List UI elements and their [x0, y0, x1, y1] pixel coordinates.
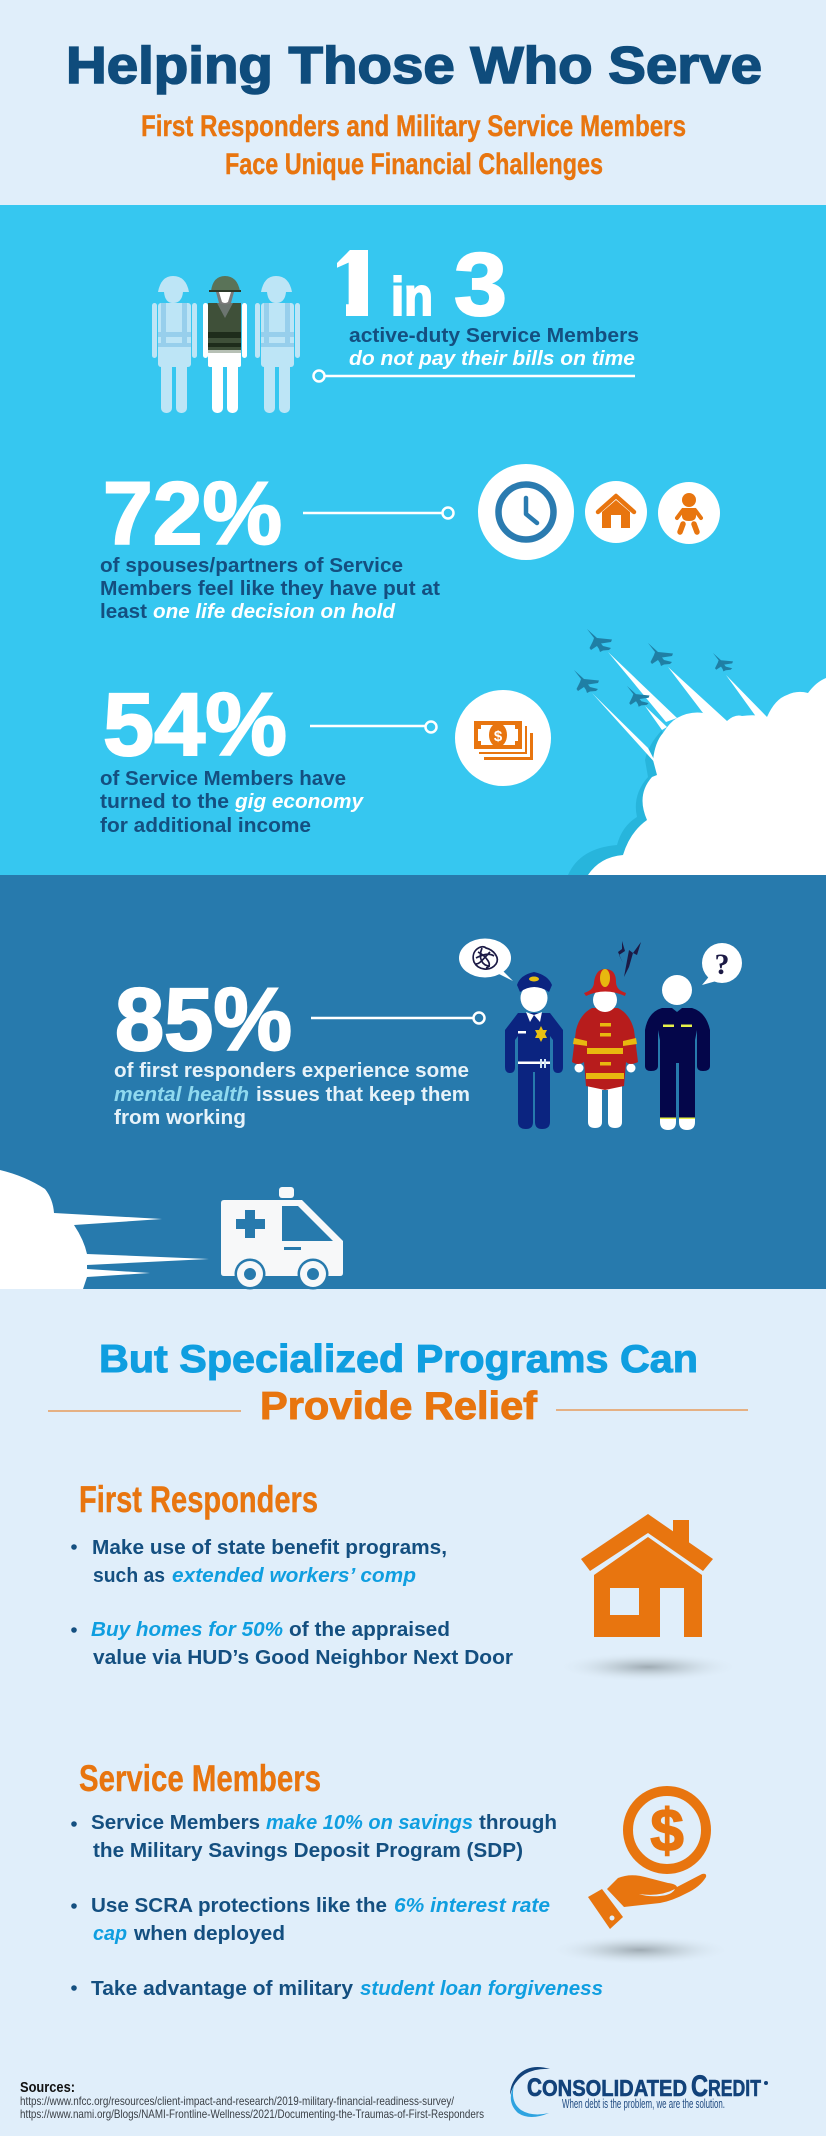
cloud shadow	[568, 730, 680, 875]
stat: 72%: one life decision on hold	[153, 601, 396, 623]
icon: baby	[658, 482, 720, 544]
subheading: Service Members	[79, 1758, 321, 1799]
stat: 72%: least	[100, 601, 147, 623]
stat: 85%: from working	[114, 1107, 246, 1129]
section: service members	[71, 1758, 603, 2000]
bullet: SCRA: cap	[93, 1923, 127, 1945]
title: Helping Those Who Serve	[66, 37, 762, 95]
stat: 1 in 3: in	[391, 267, 433, 327]
heading: relief	[48, 1338, 748, 1428]
bullet: student loan forgiveness	[71, 1978, 603, 2000]
icon: cash stack: $	[494, 728, 503, 745]
icon: cash stack	[455, 690, 551, 786]
sources: https://www.nami.org/Blogs/NAMI-Frontline-Wellness/2021/Documenting-the-Traumas-of-First-Responders	[20, 2107, 484, 2121]
logo: Consolidated Credit: ONSOLIDATED	[542, 2075, 687, 2101]
icon: house in circle	[585, 481, 647, 543]
heading: relief: But Specialized Programs Can	[99, 1338, 698, 1381]
bullet: workers comp: Make use of state benefit programs,	[92, 1537, 447, 1559]
bullet: SCRA	[71, 1895, 550, 1945]
bullet: student loan forgiveness: student loan forgiveness	[360, 1978, 603, 2000]
sources: Sources:	[20, 2079, 75, 2096]
icon: three service members	[152, 276, 300, 413]
bullet: workers comp	[71, 1537, 447, 1587]
icon: soldier	[203, 276, 247, 413]
bullet: SCRA: 6% interest rate	[394, 1895, 550, 1917]
icon: hand holding coin: $	[650, 1797, 684, 1864]
icon: clock	[478, 464, 574, 560]
contrails	[592, 652, 767, 765]
cloud	[588, 678, 826, 875]
dust cloud and speed lines	[0, 1170, 209, 1289]
logo: Consolidated Credit: C	[691, 2070, 708, 2103]
bullet: workers comp: such as	[93, 1565, 165, 1587]
stat: 72%: 72%	[103, 463, 282, 563]
jets	[574, 629, 733, 707]
stat: 85%: mental health	[114, 1084, 249, 1106]
subheading: First Responders	[79, 1479, 318, 1520]
stat: 1 in 3: do not pay their bills on time	[349, 348, 635, 370]
subtitle	[141, 110, 686, 181]
heading: relief: Provide Relief	[260, 1385, 538, 1428]
speech bubble: question: ?	[714, 948, 730, 981]
panel: first responder statistics	[0, 875, 826, 1289]
stat: 54%	[100, 674, 436, 837]
bullet: savings deposit program: through	[479, 1812, 557, 1834]
bullet: HUD homes: Buy homes for 50%	[91, 1619, 283, 1641]
bullet: savings deposit program: Service Members	[91, 1812, 260, 1834]
stat: 54%: of Service Members have	[100, 768, 346, 790]
icon: ambulance	[221, 1187, 343, 1290]
stat: 54%: 54%	[103, 674, 287, 774]
stat: 54%: turned to the	[100, 791, 229, 813]
bullet: savings deposit program	[71, 1812, 557, 1862]
stat: 1 in 3: 1	[319, 230, 393, 336]
stat: 85%: of first responders experience some	[114, 1060, 469, 1082]
header background	[0, 0, 826, 205]
stat: 85%: 85%	[115, 969, 292, 1069]
bullet: workers comp: extended workers’ comp	[172, 1565, 416, 1587]
icon: firefighter	[572, 941, 641, 1128]
bullet: HUD homes: value via HUD’s Good Neighbor Next Door	[93, 1647, 513, 1669]
bullet: HUD homes	[71, 1619, 513, 1669]
stat: 72%: of spouses/partners of Service	[100, 555, 403, 577]
stat: 54%: gig economy	[234, 791, 364, 813]
stat: 1 in 3: 3	[454, 234, 507, 334]
panel: service member statistics	[0, 205, 826, 875]
icon: hand holding coin	[548, 1791, 732, 1965]
icon: police officer	[459, 938, 563, 1129]
stat: 85%	[114, 969, 484, 1129]
icon: left worker	[152, 276, 197, 413]
stat: 1 in 3: active-duty Service Members	[349, 325, 639, 347]
bullet: HUD homes: of the appraised	[289, 1619, 450, 1641]
logo: Consolidated Credit: REDIT	[708, 2075, 761, 2101]
icon: right worker	[255, 276, 300, 413]
stat: 85%: issues that keep them	[256, 1084, 470, 1106]
sources: https://www.nfcc.org/resources/client-impact-and-research/2019-military-financial-readiness-survey/	[20, 2094, 455, 2108]
subtitle: Face Unique Financial Challenges	[225, 148, 603, 181]
panel: relief programs	[0, 1289, 826, 2136]
icon: paramedic	[645, 943, 742, 1130]
stat: 54%: for additional income	[100, 815, 311, 837]
section: first responders	[71, 1479, 513, 1669]
bullet: SCRA: when deployed	[133, 1923, 285, 1945]
lightning bolts	[618, 941, 641, 977]
speech bubble: tangled thoughts	[459, 938, 513, 981]
logo: Consolidated Credit	[510, 2067, 768, 2117]
bullet: SCRA: Use SCRA protections like the	[91, 1895, 387, 1917]
stat: 72%: Members feel like they have put at	[100, 578, 440, 600]
icon: orange house	[556, 1514, 740, 1682]
logo: Consolidated Credit: When debt is the problem, we are the solution.	[562, 2096, 725, 2111]
bullet: savings deposit program: make 10% on savings	[266, 1812, 473, 1834]
speech bubble: question	[702, 943, 742, 985]
cloud and jet formation	[568, 629, 826, 875]
subtitle: First Responders and Military Service Members	[141, 110, 686, 143]
bullet: student loan forgiveness: Take advantage of military	[91, 1978, 354, 2000]
stat: 72%	[100, 463, 454, 623]
stat: 1 in 3	[312, 250, 638, 383]
sources	[20, 2079, 484, 2121]
logo: Consolidated Credit: C	[527, 2074, 542, 2102]
bullet: savings deposit program: the Military Savings Deposit Program (SDP)	[93, 1840, 523, 1862]
